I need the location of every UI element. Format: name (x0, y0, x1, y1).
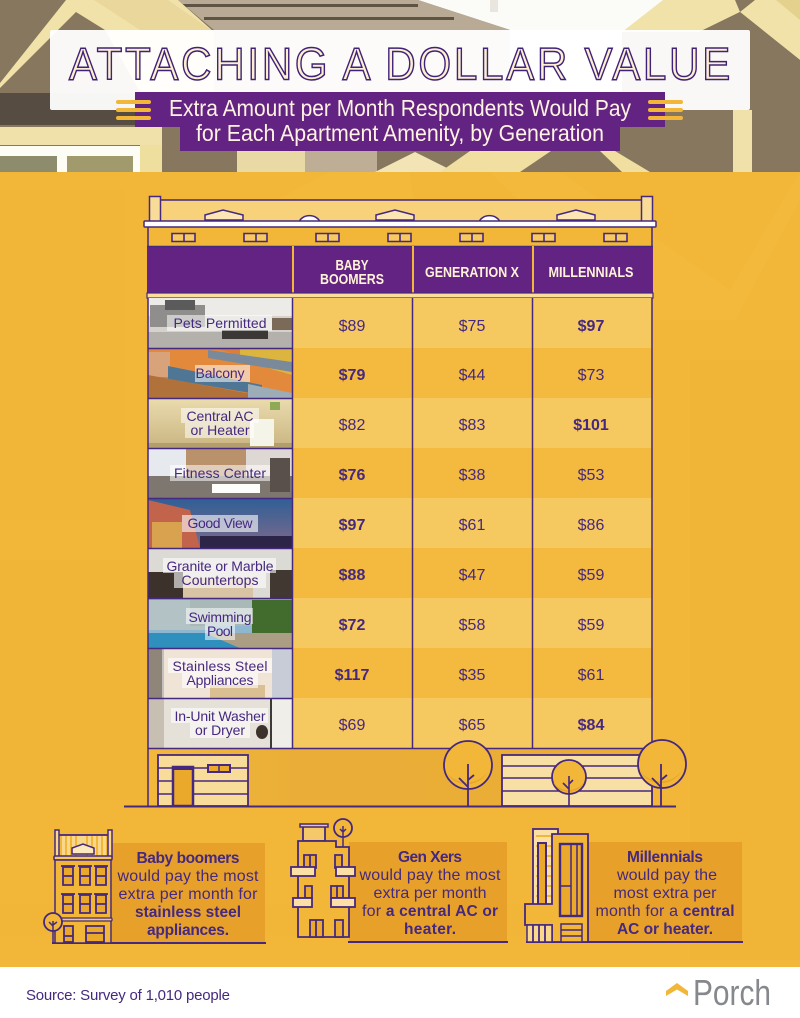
photo: in-unit washer or dryer (148, 698, 292, 748)
photo: stainless steel appliances: Stainless Steel (172, 658, 268, 674)
table values: baby boomers: $69 (339, 717, 365, 734)
callout: gen xers: would pay the most (358, 867, 501, 884)
callout: gen xers: Gen Xers (398, 849, 462, 866)
photo: pets permitted (148, 298, 292, 348)
source note: Source: Survey of 1,010 people (26, 987, 230, 1004)
callout: gen xers: extra per month (374, 885, 486, 902)
subtitle banner: Extra Amount per Month Respondents Would Pay (169, 95, 631, 121)
photo: central AC or heater (148, 398, 292, 448)
photo: in-unit washer or dryer: In-Unit Washer (174, 708, 266, 724)
table values: baby boomers: $117 (335, 667, 369, 684)
header photo: house exterior (0, 0, 800, 172)
table header: BABY (336, 258, 369, 274)
icon: brick townhouse (44, 830, 112, 943)
table values: millennials: $53 (578, 467, 604, 484)
callout: millennials: month for a central (596, 903, 734, 920)
table values: generation X: $44 (459, 367, 485, 384)
table values: baby boomers: $79 (339, 367, 365, 384)
photo: swimming pool: Pool (207, 623, 233, 639)
table values: generation X: $47 (459, 567, 485, 584)
table values: millennials: $97 (578, 318, 604, 335)
icon: tree right (638, 740, 686, 806)
callout: baby boomers: stainless steel (135, 904, 241, 921)
table values: millennials: $84 (578, 717, 604, 734)
title panel (50, 30, 750, 110)
table values: baby boomers: $97 (339, 517, 365, 534)
yellow content band (0, 172, 800, 967)
photo: granite or marble countertops: Countertops (182, 572, 258, 588)
photo: balcony (148, 348, 292, 398)
table values: baby boomers: $88 (339, 567, 365, 584)
callout: millennials: most extra per (614, 885, 717, 902)
photo: in-unit washer or dryer: or Dryer (195, 722, 245, 738)
logo: Porch: Porch (693, 972, 771, 1013)
table header (147, 246, 653, 298)
photo: central AC or heater: Central AC (186, 408, 254, 424)
icon: apartment with balconies (291, 819, 355, 937)
photo: fitness center (148, 448, 292, 498)
table values: generation X: $61 (459, 517, 485, 534)
photo: fitness center: Fitness Center (174, 465, 266, 481)
photo: good view (148, 498, 292, 548)
callout: millennials (525, 829, 743, 943)
callout: baby boomers: would pay the most (116, 868, 259, 885)
table values: baby boomers (335, 318, 369, 734)
table values: generation X: $35 (459, 667, 485, 684)
table values: millennials: $61 (578, 667, 604, 684)
table header: MILLENNIALS (548, 265, 634, 281)
table values: baby boomers: $72 (339, 617, 365, 634)
table header: GENERATION X (425, 265, 519, 281)
table values: millennials: $59 (578, 567, 604, 584)
photo: swimming pool: Swimming (188, 609, 252, 625)
callout: millennials: Millennials (627, 849, 703, 866)
table values: baby boomers: $82 (339, 417, 365, 434)
table values: generation X: $75 (459, 318, 485, 335)
table values: generation X: $58 (459, 617, 485, 634)
photo: stainless steel appliances (148, 648, 292, 698)
callout: millennials: would pay the (616, 867, 717, 884)
table values: generation X (459, 318, 485, 734)
photo: central AC or heater: or Heater (190, 422, 250, 438)
callout: baby boomers: appliances. (147, 922, 229, 939)
title: ATTACHING A DOLLAR VALUE (69, 38, 733, 90)
table values: baby boomers: $89 (339, 318, 365, 335)
table values: generation X: $38 (459, 467, 485, 484)
table values: generation X: $65 (459, 717, 485, 734)
photo: granite or marble countertops: Granite or Marble (166, 558, 274, 574)
subtitle banner (116, 92, 683, 151)
icon: tree left (444, 741, 492, 806)
callout: millennials: AC or heater. (617, 921, 713, 938)
callout: baby boomers: Baby boomers (136, 850, 240, 867)
photo: stainless steel appliances: Appliances (186, 672, 254, 688)
callout: gen xers (291, 819, 508, 943)
left shop front (158, 755, 248, 806)
table header: BOOMERS (320, 272, 384, 288)
table values: generation X: $83 (459, 417, 485, 434)
photo: good view: Good View (188, 515, 253, 531)
table values: millennials: $59 (578, 617, 604, 634)
photo: balcony: Balcony (196, 365, 244, 381)
ground line (124, 806, 676, 808)
callout: gen xers: for a central AC or (362, 903, 498, 920)
table values: millennials: $101 (573, 417, 609, 434)
callout: baby boomers: extra per month for (118, 886, 258, 903)
table row backgrounds (293, 298, 652, 748)
icon: tree middle (552, 760, 586, 806)
callout: baby boomers (44, 830, 266, 944)
logo: Porch (666, 972, 771, 1013)
photo: pets permitted: Pets Permitted (174, 315, 266, 331)
building ground floor with trees (124, 298, 686, 808)
table values: millennials: $86 (578, 517, 604, 534)
callout: gen xers: heater. (404, 921, 456, 938)
right shop front (502, 755, 652, 806)
photo: swimming pool (148, 598, 292, 648)
photo: granite or marble countertops (148, 548, 292, 598)
table values: millennials (573, 318, 609, 734)
building roof and cornice (144, 196, 656, 246)
subtitle banner: for Each Apartment Amenity, by Generation (196, 120, 604, 146)
table values: millennials: $73 (578, 367, 604, 384)
table values: baby boomers: $76 (339, 467, 365, 484)
icon: modern tower (525, 829, 588, 942)
